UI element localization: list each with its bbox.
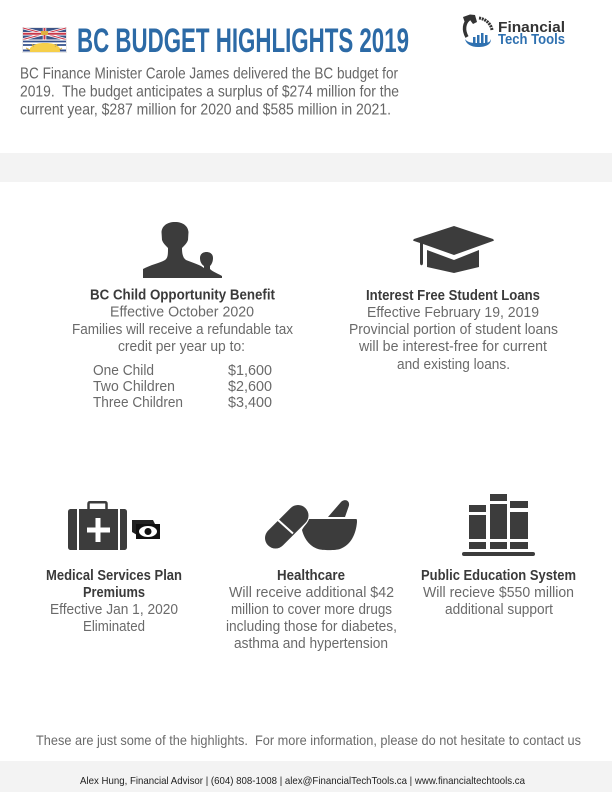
body text [50, 602, 178, 635]
panel: Healthcare [226, 500, 397, 652]
icon: banknotes [132, 520, 160, 539]
panel: BC Child Opportunity Benefit [72, 222, 294, 411]
body text [423, 585, 574, 618]
intro text: current year, $287 million for 2020 and $585 million in 2021. [20, 102, 391, 118]
logo: Financial Tech Tools: Financial [498, 20, 565, 36]
body text [72, 304, 294, 355]
panel: Public Education System [421, 494, 576, 618]
icon: books [462, 494, 535, 556]
heading: Public Education System [421, 568, 576, 584]
body text: additional support [445, 602, 553, 618]
benefit table: $2,600 [228, 379, 272, 395]
body text: credit per year up to: [118, 339, 245, 355]
title: BC BUDGET HIGHLIGHTS 2019 [77, 22, 409, 60]
heading: Healthcare [277, 568, 345, 584]
intro text: 2019. The budget anticipates a surplus of $274 million for the [20, 84, 399, 100]
logo: Financial Tech Tools [463, 14, 565, 48]
footer band [0, 761, 612, 792]
icon: graduation cap [413, 226, 494, 273]
body text: Families will receive a refundable tax [72, 322, 294, 338]
logo: Financial Tech Tools: Tech Tools [498, 32, 565, 48]
icon: pill and mortar [276, 500, 357, 550]
body text: Provincial portion of student loans [349, 322, 558, 338]
heading: BC Child Opportunity Benefit [90, 288, 275, 304]
body text: Effective October 2020 [110, 304, 254, 320]
body text: million to cover more drugs [231, 602, 392, 618]
heading: Premiums [83, 585, 145, 601]
benefit table: $3,400 [228, 395, 272, 411]
heading: Interest Free Student Loans [366, 288, 540, 304]
body text [226, 585, 397, 652]
body text: will be interest-free for current [358, 339, 547, 355]
body text [349, 305, 558, 373]
intro text: BC Finance Minister Carole James delivered the BC budget for [20, 66, 399, 82]
body text: Will receive additional $42 [229, 585, 394, 601]
body text: Effective Jan 1, 2020 [50, 602, 178, 618]
panel: Interest Free Student Loans [349, 226, 558, 373]
benefit table: Two Children [93, 379, 175, 395]
heading [46, 568, 182, 601]
icon: adult and child silhouette [143, 222, 222, 278]
icon: medical case [68, 502, 127, 550]
body text: Will recieve $550 million [423, 585, 574, 601]
body text: asthma and hypertension [234, 636, 388, 652]
grey band [0, 153, 612, 182]
benefit table: Three Children [93, 395, 183, 411]
icon: BC flag [22, 27, 67, 53]
body text: and existing loans. [397, 357, 510, 373]
benefit table: One Child [93, 363, 154, 379]
benefit table [93, 363, 272, 411]
body text: including those for diabetes, [226, 619, 397, 635]
footer contact text: Alex Hung, Financial Advisor | (604) 808-1008 | alex@FinancialTechTools.ca | www.financialtechtools.ca [80, 775, 525, 787]
heading: Medical Services Plan [46, 568, 182, 584]
panel: Medical Services Plan Premiums [46, 502, 182, 635]
body text: Effective February 19, 2019 [367, 305, 539, 321]
body text: Eliminated [83, 619, 145, 635]
intro text [20, 66, 399, 118]
benefit table: $1,600 [228, 363, 272, 379]
